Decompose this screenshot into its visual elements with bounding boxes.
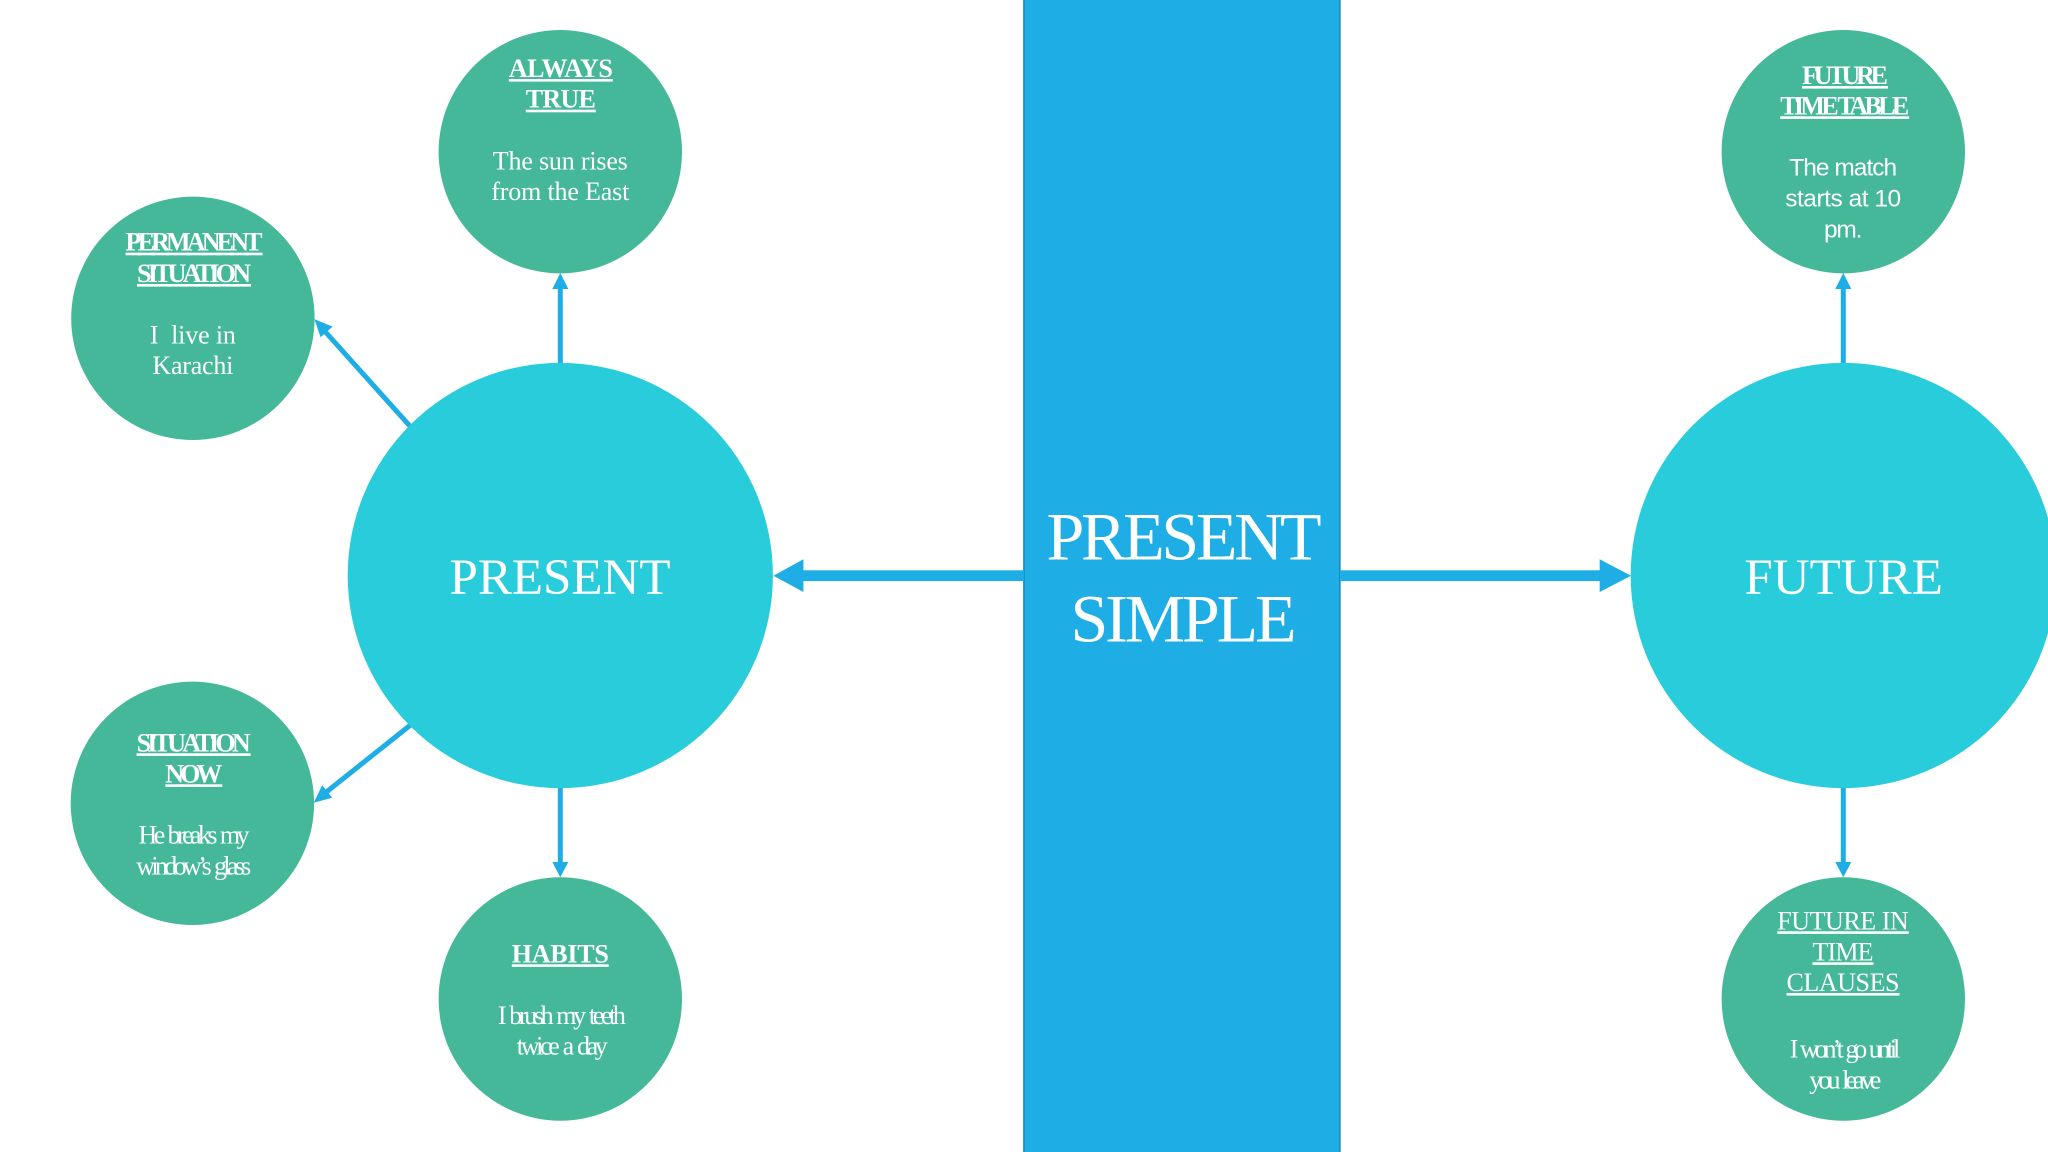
node: always true: The sun rises [493, 146, 628, 175]
central title: PRESENT [1046, 498, 1322, 574]
arrow: future to future timetable [1835, 273, 1851, 366]
arrow: future to future in time clauses [1835, 785, 1851, 877]
node: future in time clauses: I won’t go until [1790, 1034, 1900, 1063]
node: always true: ALWAYS [509, 54, 613, 83]
node: situation now: NOW [165, 759, 222, 788]
node: always true [439, 30, 682, 273]
node: always true: from the East [491, 177, 630, 206]
node: future in time clauses: CLAUSES [1786, 968, 1900, 997]
node: permanent situation [71, 197, 315, 440]
node: always true: TRUE [526, 85, 596, 114]
node: permanent situation: PERMANENT [126, 228, 262, 257]
hub: future [1631, 363, 2048, 788]
hub: future: FUTURE [1744, 550, 1943, 606]
node: future timetable: starts at 10 [1785, 186, 1901, 213]
arrow: present to always true [552, 273, 568, 366]
node: future in time clauses: TIME [1812, 937, 1874, 966]
arrow: band to future [1340, 559, 1631, 592]
node: permanent situation: I live in [150, 320, 236, 349]
node: future timetable [1722, 30, 1965, 273]
node: habits: twice a day [517, 1032, 608, 1061]
node: permanent situation: SITUATION [137, 259, 251, 288]
node: permanent situation: Karachi [152, 351, 233, 380]
hub: present [348, 363, 773, 788]
hub: present: PRESENT [450, 550, 670, 606]
node: future in time clauses: you leave [1809, 1065, 1881, 1094]
node: habits: I brush my teeth [498, 1001, 626, 1030]
arrow: present to permanent situation [314, 319, 410, 427]
central title [1046, 498, 1322, 656]
central title: SIMPLE [1070, 580, 1296, 656]
arrow: band to present [773, 559, 1024, 592]
node: situation now: window’s glass [136, 851, 251, 880]
node: situation now [71, 682, 314, 925]
node: situation now: SITUATION [137, 728, 251, 757]
node: future timetable: pm. [1824, 216, 1862, 243]
central band: present simple [1024, 0, 1340, 1152]
arrow: present to situation now [314, 725, 410, 803]
node: future in time clauses [1722, 877, 1965, 1121]
node: future timetable: FUTURE [1802, 61, 1888, 90]
node: habits [439, 877, 682, 1121]
node: habits: HABITS [512, 939, 609, 968]
node: future in time clauses: FUTURE IN [1777, 906, 1909, 935]
node: future timetable: The match [1789, 155, 1897, 182]
node: situation now: He breaks my [138, 821, 250, 850]
node: future timetable: TIME TABLE [1780, 91, 1909, 120]
arrow: present to habits [552, 785, 568, 877]
